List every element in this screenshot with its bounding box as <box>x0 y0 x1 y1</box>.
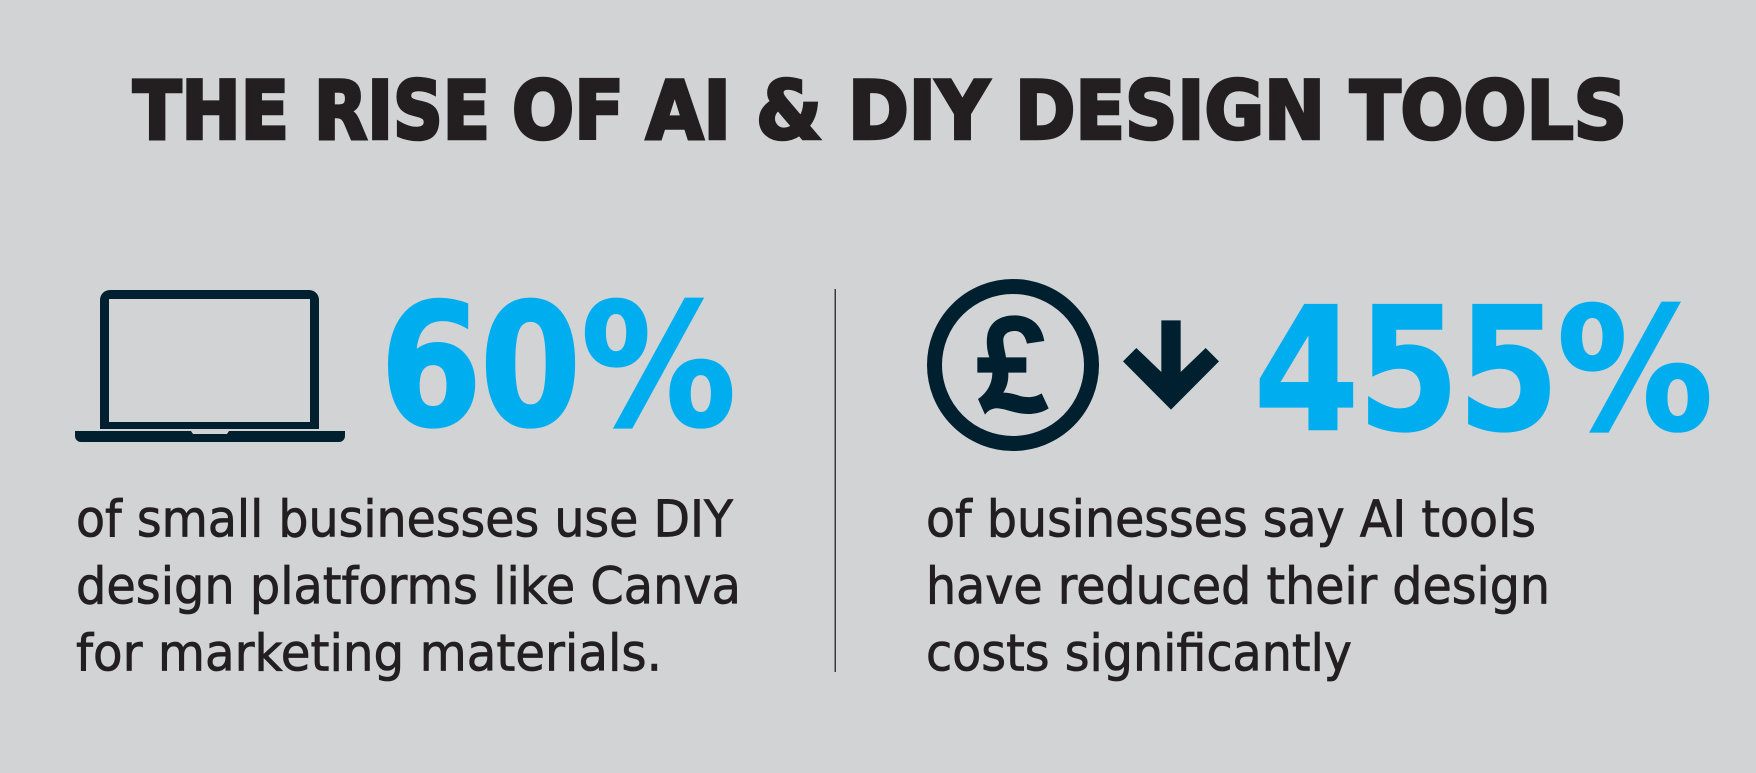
title: THE <box>133 64 289 158</box>
panel: AI tools stat <box>926 272 1713 684</box>
statistic: 60%: % <box>581 268 736 466</box>
statistic: 60%: 0 <box>480 268 581 466</box>
title: DIY <box>848 64 990 158</box>
icon: laptop <box>75 290 345 442</box>
statistic: 455%: % <box>1557 272 1713 470</box>
statistic: 455%: 4 <box>1254 272 1359 470</box>
description: DIY platforms: of small businesses use DIY <box>76 490 734 550</box>
title: TOOLS <box>1350 64 1627 158</box>
panel: DIY platforms stat <box>75 268 757 684</box>
title: RISE <box>314 64 490 158</box>
statistic: 60%: 6 <box>380 268 482 466</box>
title: OF <box>512 64 624 158</box>
title: & <box>756 64 822 158</box>
statistic: 455%: 5 <box>1458 272 1559 470</box>
description: AI tools: of businesses say AI tools <box>926 490 1536 550</box>
description: AI tools: costs significantly <box>926 624 1352 684</box>
description: DIY platforms: design platforms like Canva <box>76 558 741 616</box>
description: AI tools: have reduced their design <box>926 558 1550 616</box>
title: DESIGN <box>1015 64 1325 158</box>
icon: pound coin <box>934 286 1092 444</box>
statistic: 455%: 5 <box>1358 272 1459 470</box>
description: DIY platforms: for marketing materials. <box>76 624 662 684</box>
title: AI <box>646 64 731 158</box>
icon: down arrow <box>1123 320 1219 410</box>
